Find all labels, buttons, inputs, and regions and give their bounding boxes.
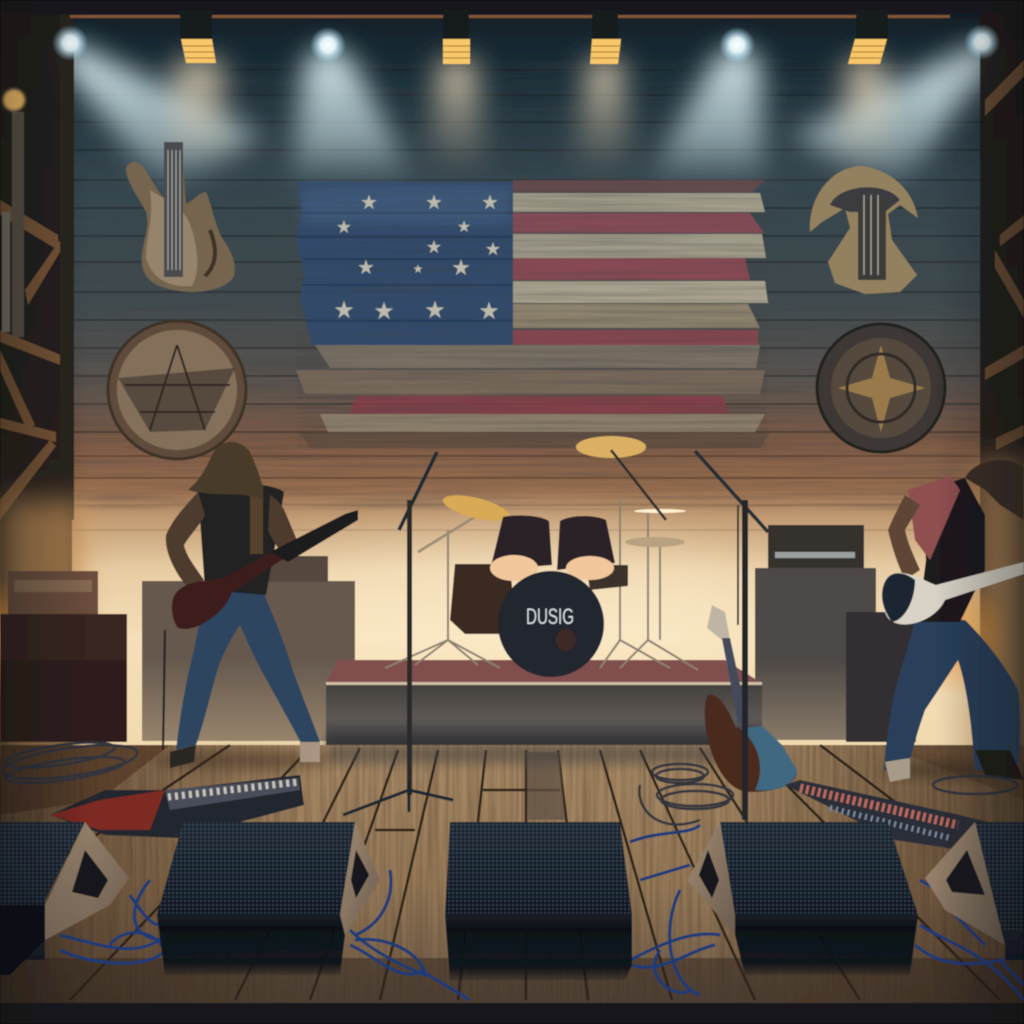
stars: ★ — [478, 298, 500, 325]
stars: ★ — [357, 257, 375, 279]
wall guitar: right — [810, 166, 918, 294]
rack toms — [490, 515, 552, 570]
microphone stand: centre right — [695, 451, 768, 820]
barn timber frame: left — [0, 0, 85, 760]
wall medallion: left — [107, 320, 247, 460]
stars: ★ — [336, 217, 352, 237]
drum kit — [385, 436, 698, 677]
stars: ★ — [360, 192, 378, 214]
hair — [188, 442, 263, 500]
stripes — [513, 180, 765, 192]
stage monitor: far left — [0, 822, 129, 975]
barn timber frame: right — [975, 0, 1024, 760]
amps behind right guitarist — [755, 525, 916, 742]
stars: ★ — [373, 298, 395, 325]
wall guitar: left — [126, 142, 235, 292]
wall medallion: right — [816, 323, 946, 453]
spotlight beams — [55, 42, 998, 190]
stage monitor: right — [687, 822, 918, 975]
stage monitor: far right — [925, 822, 1024, 960]
back wall — [0, 0, 1024, 760]
microphone stand: centre left — [343, 452, 453, 815]
floor tom — [450, 564, 514, 634]
stars: ★ — [485, 239, 501, 259]
spot lamps — [180, 10, 888, 40]
stars: ★ — [424, 297, 446, 324]
right guitar player — [880, 460, 1024, 782]
wood floor — [0, 745, 1024, 1024]
drum riser — [325, 660, 762, 755]
stars: ★ — [425, 192, 443, 214]
drum logo text: DUSIG — [526, 604, 574, 629]
bass — [172, 548, 285, 629]
arms — [166, 492, 205, 590]
stars: ★ — [481, 192, 499, 214]
distressed American flag on boards — [296, 180, 770, 448]
stars: ★ — [426, 237, 442, 257]
torso — [198, 484, 284, 595]
cables and pedalboards — [1, 737, 1024, 1000]
legs — [176, 590, 320, 750]
stars: ★ — [333, 297, 355, 324]
left bass player — [150, 442, 358, 770]
stage monitor: centre — [445, 822, 632, 980]
stars — [333, 192, 501, 325]
amps behind left guitarist — [0, 556, 355, 742]
stars: ★ — [457, 219, 471, 236]
stars: ★ — [413, 262, 423, 276]
stage monitor: left — [157, 822, 380, 975]
kick drum — [498, 571, 604, 677]
fog and warm stage glow — [0, 540, 1010, 700]
ceiling beam and lights — [0, 0, 1024, 64]
stars: ★ — [451, 255, 471, 280]
floor-standing guitar — [705, 605, 797, 792]
